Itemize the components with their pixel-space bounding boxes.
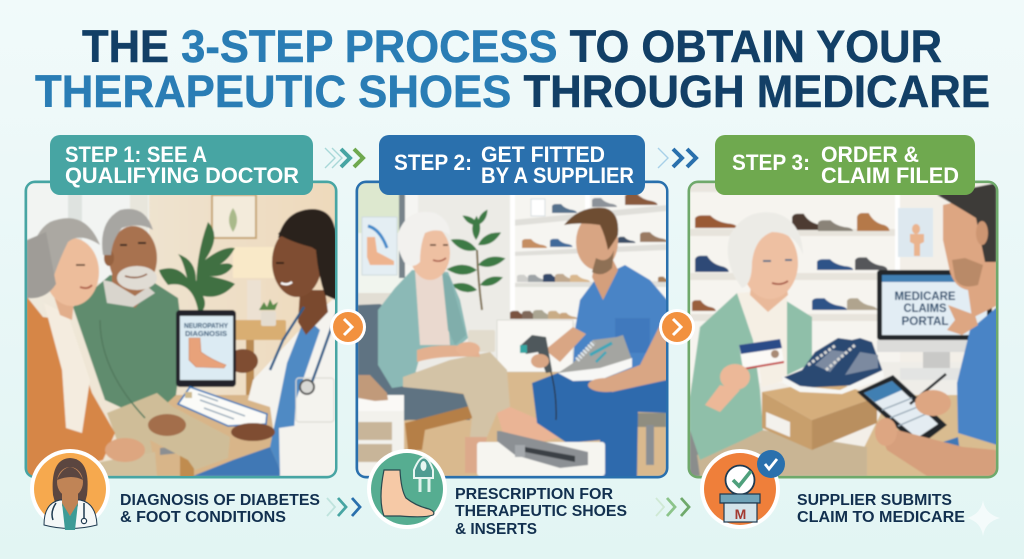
panel: step 1 doctor visit illustration: DIAGNOSIS	[185, 329, 227, 338]
step 1 heading badge	[50, 135, 313, 195]
arrow: step 1 to step 2	[325, 148, 363, 168]
panel: step 1 doctor visit illustration	[26, 182, 337, 477]
step 2 heading badge: GET FITTED	[481, 142, 605, 167]
arrow: prescription to claim	[656, 498, 689, 516]
text: claim	[797, 492, 965, 526]
icon: doctor	[30, 449, 110, 530]
step 2 heading badge: STEP 2:	[394, 150, 472, 175]
icon: foot and insert	[367, 449, 447, 529]
text: prescription: PRESCRIPTION FOR	[455, 486, 613, 503]
text: diagnosis	[120, 492, 320, 526]
text: diagnosis: DIAGNOSIS OF DIABETES	[120, 492, 320, 509]
step 1 heading badge: QUALIFYING DOCTOR	[65, 163, 299, 188]
arrow: diagnosis to prescription	[327, 498, 360, 516]
title: THERAPEUTIC SHOES THROUGH MEDICARE	[35, 66, 990, 117]
text: claim: CLAIM TO MEDICARE	[797, 509, 965, 526]
next button: panel 1 to panel 2	[330, 309, 366, 345]
panel: step 3 order and claim illustration: PORTAL	[902, 314, 948, 328]
text: diagnosis: & FOOT CONDITIONS	[120, 509, 286, 526]
text: prescription: & INSERTS	[455, 521, 537, 538]
step 3 heading badge: CLAIM FILED	[821, 163, 959, 188]
arrow: step 2 to step 3	[658, 148, 696, 168]
icon: claim box with check	[700, 449, 785, 529]
step 3 heading badge: STEP 3:	[732, 150, 810, 175]
title	[35, 21, 990, 117]
step 1 heading badge: STEP 1: SEE A	[65, 142, 207, 167]
panel: step 3 order and claim illustration: CLAIMS	[904, 301, 946, 315]
next button: panel 2 to panel 3	[659, 309, 695, 345]
step 2 heading badge	[379, 135, 645, 195]
text: prescription: THERAPEUTIC SHOES	[455, 503, 627, 520]
panel: step 3 order and claim illustration	[689, 182, 997, 477]
title: THE 3-STEP PROCESS TO OBTAIN YOUR	[82, 21, 942, 72]
text: prescription	[455, 486, 627, 538]
step 3 heading badge	[715, 135, 975, 195]
panel: step 3 order and claim illustration: MEDICARE	[894, 289, 956, 303]
sparkle decoration	[967, 500, 1000, 536]
step 2 heading badge: BY A SUPPLIER	[481, 163, 634, 188]
panel: step 2 fitting illustration	[357, 182, 673, 477]
text: claim: SUPPLIER SUBMITS	[797, 492, 952, 509]
icon: claim box with check: M	[735, 506, 746, 522]
panel: step 1 doctor visit illustration: NEUROPATHY	[184, 321, 228, 330]
step 3 heading badge: ORDER &	[821, 142, 919, 167]
